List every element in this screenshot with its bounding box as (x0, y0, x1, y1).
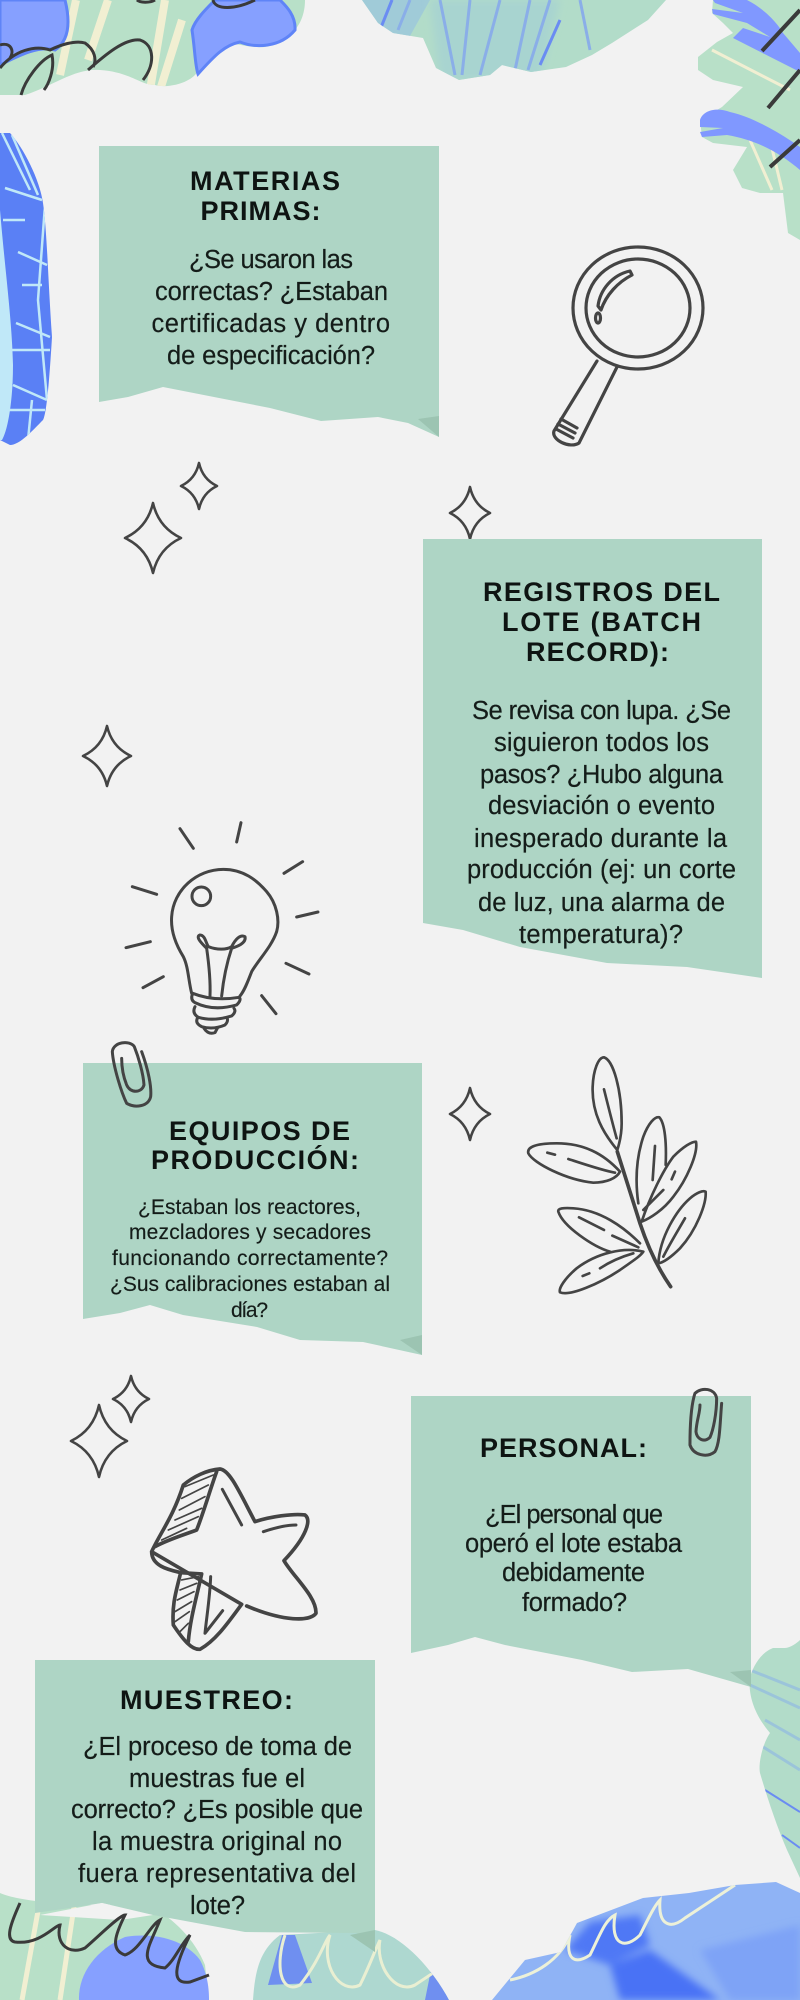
text: personal: ¿El personal que (485, 1501, 663, 1529)
panel: personal (411, 1396, 751, 1687)
text: personal: operó el lote estaba (465, 1530, 683, 1558)
text: equipos de produccion: funcionando correctamente? (112, 1247, 388, 1270)
icon: sparkle (450, 1088, 490, 1140)
panel: materias primas (99, 146, 439, 437)
text: muestreo: muestras fue el (129, 1765, 305, 1793)
text: muestreo: correcto? ¿Es posible que (71, 1796, 363, 1824)
text: registros del lote: desviación o evento (488, 792, 715, 820)
text: materias primas: certificadas y dentro (152, 310, 390, 338)
text: registros del lote: inesperado durante la (474, 825, 728, 853)
text: registros del lote: Se revisa con lupa. ¿Se (472, 697, 731, 725)
icon: sparkle (125, 503, 181, 573)
heading: equipos de produccion (151, 1116, 359, 1175)
heading: registros del lote: REGISTROS DEL (483, 577, 720, 607)
text: muestreo: la muestra original no (92, 1828, 342, 1856)
icon: sparkle (450, 487, 490, 539)
text: muestreo: fuera representativa del (78, 1860, 356, 1888)
text: personal (465, 1501, 683, 1617)
text: registros del lote (467, 697, 736, 949)
heading: registros del lote: RECORD): (526, 637, 669, 667)
text: registros del lote: de luz, una alarma de (478, 889, 725, 917)
text: materias primas: correctas? ¿Estaban (155, 278, 388, 306)
icon: paperclip (112, 1043, 151, 1106)
panel: equipos de produccion (83, 1063, 422, 1355)
icon: magnifying glass (554, 247, 703, 445)
text: materias primas: de especificación? (167, 342, 375, 370)
heading: equipos de produccion: EQUIPOS DE (169, 1116, 350, 1146)
decoration: right paint blob (750, 1640, 800, 1878)
icon: sparkle (113, 1376, 149, 1422)
decoration: top-left paint blob (0, 0, 320, 100)
text: equipos de produccion: ¿Estaban los reactores, (138, 1196, 361, 1219)
text: equipos de produccion: mezcladores y secadores (129, 1221, 371, 1244)
heading: registros del lote (483, 577, 720, 667)
decoration: left blue scribble (0, 133, 52, 445)
heading: registros del lote: LOTE (BATCH (502, 607, 701, 637)
heading: muestreo: MUESTREO: (120, 1685, 293, 1715)
decoration: bottom-right paint blob (490, 1880, 800, 2000)
text: equipos de produccion: ¿Sus calibraciones estaban al (110, 1273, 390, 1296)
panel: registros del lote (423, 539, 762, 978)
text: personal: debidamente (502, 1559, 645, 1587)
text: muestreo: lote? (190, 1892, 245, 1920)
text: registros del lote: pasos? ¿Hubo alguna (480, 761, 724, 789)
icon: paperclip (690, 1389, 722, 1455)
decoration: bottom-left paint blob (0, 1885, 215, 2000)
text: equipos de produccion (110, 1196, 390, 1322)
icon: light bulb (126, 823, 318, 1033)
text: equipos de produccion: día? (231, 1299, 268, 1322)
icon: sparkle (181, 463, 217, 509)
text: registros del lote: siguieron todos los (494, 729, 709, 757)
heading: materias primas (190, 166, 340, 226)
icon: leafy branch (528, 1057, 706, 1293)
icon: sparkle (71, 1405, 127, 1477)
text: muestreo (71, 1733, 363, 1920)
heading: materias primas: PRIMAS: (200, 196, 320, 226)
text: registros del lote: producción (ej: un corte (467, 856, 736, 884)
decoration: top-centre paint blob (360, 0, 670, 85)
heading: equipos de produccion: PRODUCCIÓN: (151, 1144, 359, 1175)
icon: sparkle (83, 726, 131, 786)
decoration: bottom-centre paint blob (250, 1925, 450, 2000)
text: materias primas: ¿Se usaron las (189, 246, 353, 274)
heading: personal: PERSONAL: (480, 1433, 647, 1463)
icon: star (152, 1469, 316, 1649)
text: muestreo: ¿El proceso de toma de (83, 1733, 352, 1761)
heading: materias primas: MATERIAS (190, 166, 340, 196)
text: personal: formado? (522, 1589, 627, 1617)
text: materias primas (152, 246, 390, 370)
decoration: top-right leaf strokes (690, 0, 800, 245)
panel: muestreo (35, 1660, 375, 1952)
text: registros del lote: temperatura)? (519, 921, 683, 949)
decoration: bottom-left scribble (10, 1903, 209, 1982)
